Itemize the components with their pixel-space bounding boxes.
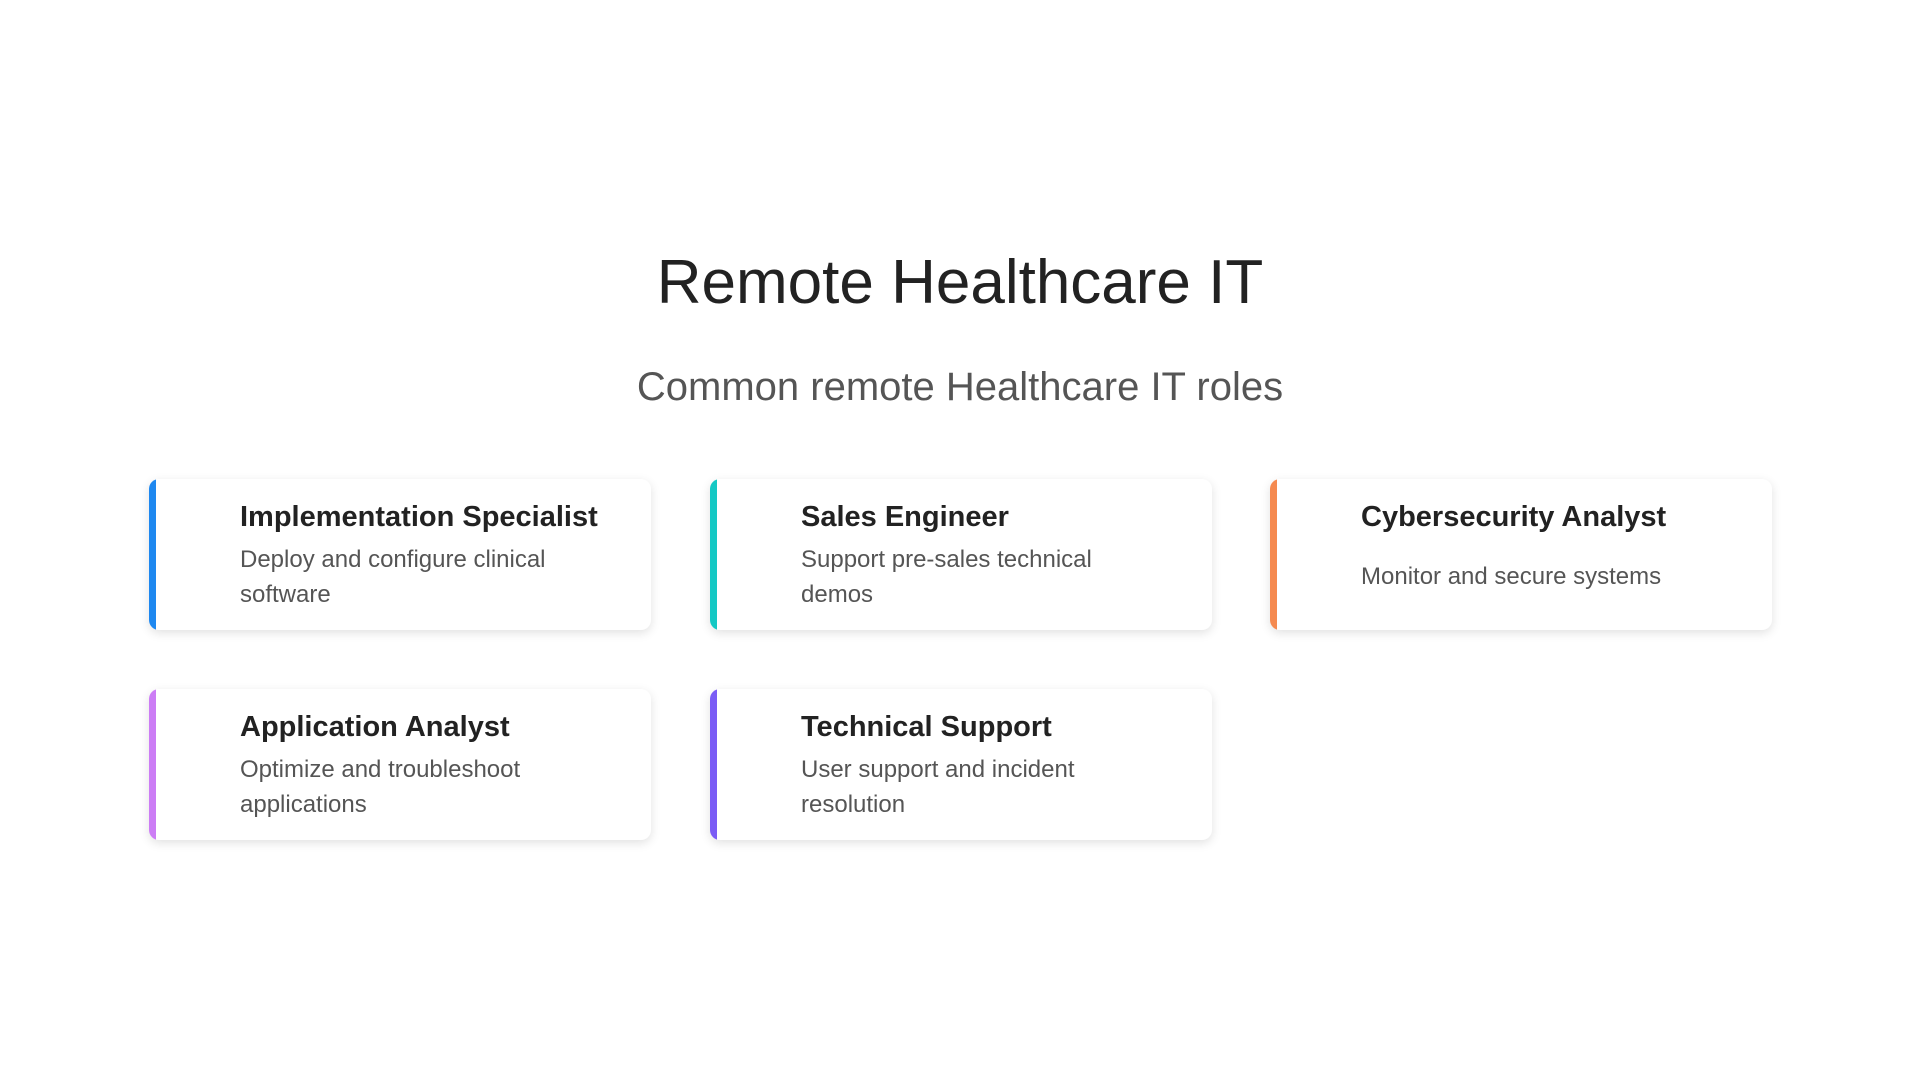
card: cybersecurity analyst [1270, 479, 1772, 630]
card: technical support [710, 689, 1212, 840]
card: implementation specialist: Deploy and configure clinical software [240, 546, 546, 608]
card: implementation specialist: Implementation Specialist [240, 501, 598, 533]
card: sales engineer [710, 479, 1212, 630]
title: Remote Healthcare IT [657, 248, 1263, 317]
card: implementation specialist [149, 479, 651, 630]
card: sales engineer: Support pre-sales technical demos [801, 546, 1092, 608]
card: application analyst: Optimize and troubleshoot applications [240, 756, 520, 818]
card: cybersecurity analyst: Monitor and secure systems [1361, 563, 1661, 590]
card: application analyst [149, 689, 651, 840]
card: cybersecurity analyst: Cybersecurity Analyst [1361, 501, 1666, 533]
card: technical support: User support and incident resolution [801, 756, 1074, 818]
card: sales engineer: Sales Engineer [801, 501, 1009, 533]
card: technical support: Technical Support [801, 711, 1052, 743]
subtitle: Common remote Healthcare IT roles [637, 365, 1283, 409]
card: application analyst: Application Analyst [240, 711, 510, 743]
